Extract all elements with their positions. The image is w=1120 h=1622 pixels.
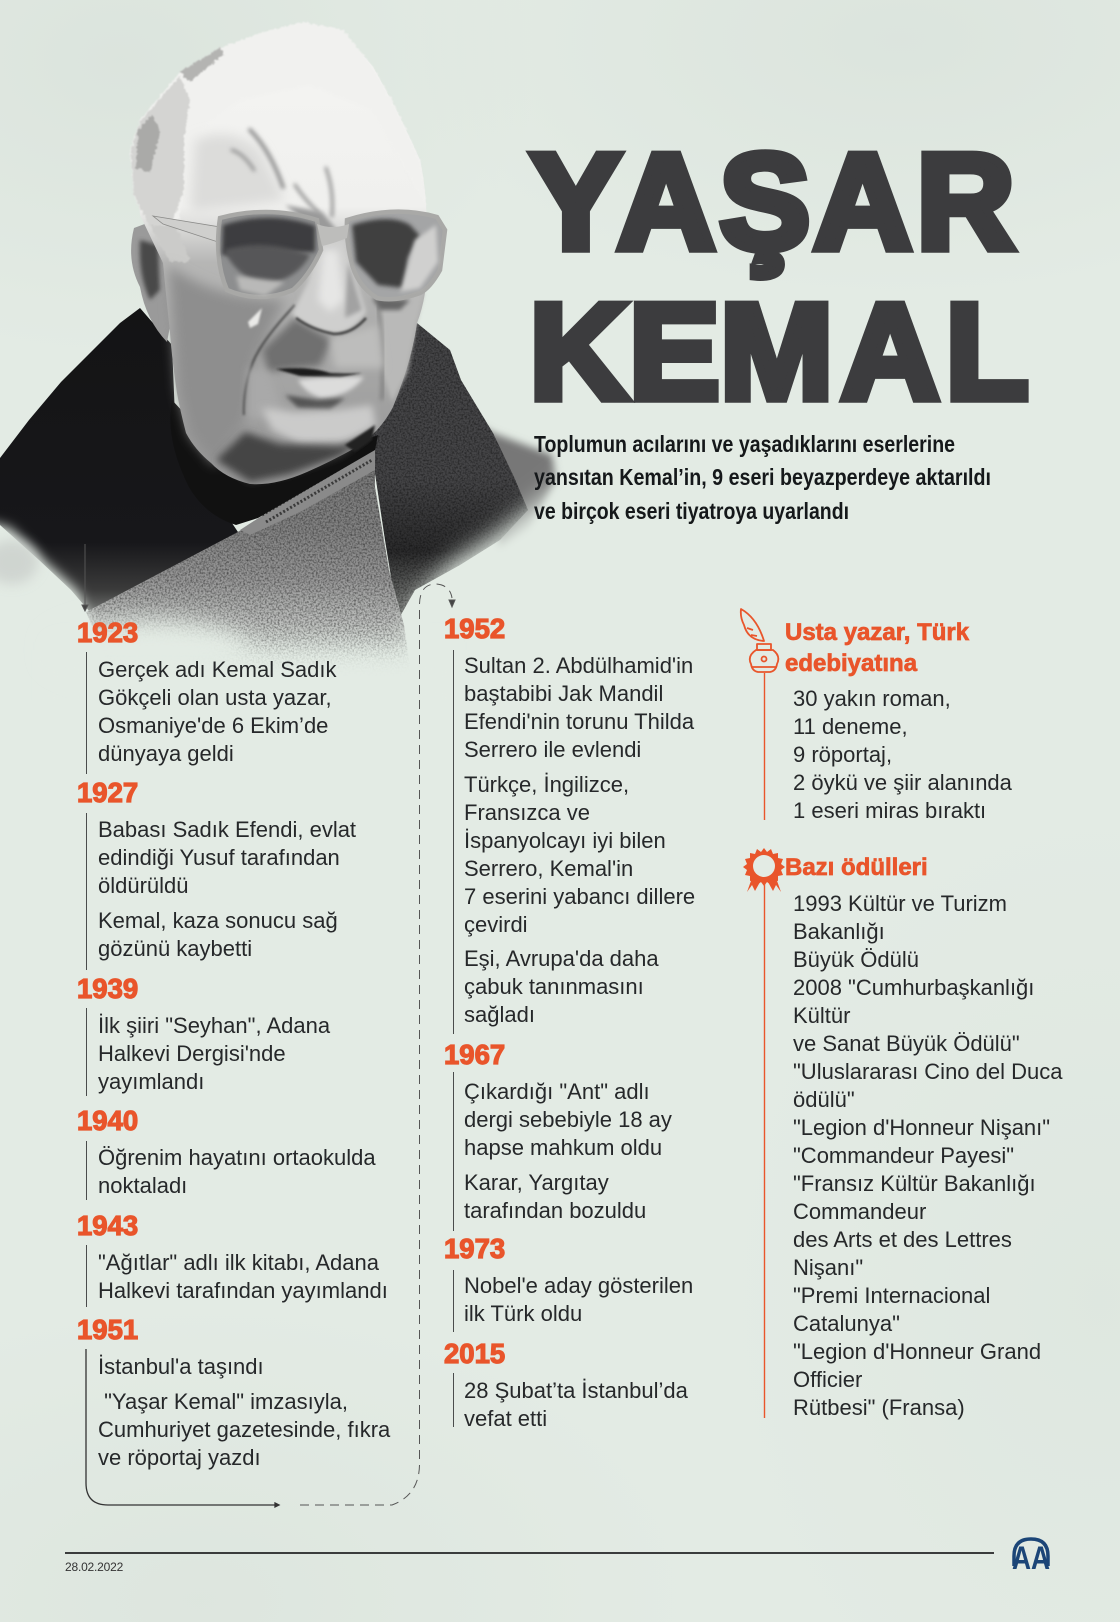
heading: awards: Bazı ödülleri	[785, 854, 928, 881]
right cheek	[378, 292, 424, 402]
entry: 1939: 1939	[77, 973, 138, 1004]
entry: 1943: 1943	[77, 1210, 138, 1241]
entry: 1951: İstanbul'a taşındı	[98, 1354, 264, 1379]
timeline column 1	[65, 613, 1062, 1574]
text: awards list: 1993 Kültür ve Turizm Bakanlığı Büyük Ödülü 2008 "Cumhurbaşkanlığı Kültür ve Sanat Büyük Ödülü" "Uluslararası Cino del Duca ödülü" "Legion d'Honneur Nişanı" "Commandeur Payesi" "Fransız Kültür Bakanlığı Commandeur des Arts et des Lettres Nişanı" "Premi Internacional Catalunya" "Legion d'Honneur Grand Officier Rütbesi" (Fransa)	[793, 890, 1062, 1420]
entry: 1940	[77, 1105, 376, 1200]
photo fade: right side	[408, 470, 640, 720]
left cheek	[168, 265, 285, 465]
entry: 1927: Kemal, kaza sonucu sağ gözünü kaybetti	[98, 908, 338, 960]
title: YAŞAR	[530, 126, 1015, 278]
hair	[130, 22, 426, 262]
subtitle	[534, 431, 991, 524]
glasses	[153, 212, 445, 299]
vertical rule: awards	[764, 882, 766, 1418]
entry: 1943: "Ağıtlar" adlı ilk kitabı, Adana Halkevi tarafından yayımlandı	[98, 1250, 388, 1303]
photo fade: left corner	[0, 518, 92, 720]
entry: 1939: İlk şiiri "Seyhan", Adana Halkevi Dergisi'nde yayımlandı	[98, 1013, 330, 1094]
entry: 1927	[77, 777, 356, 970]
sweater	[86, 450, 412, 690]
cheek highlight	[248, 308, 262, 328]
crease	[244, 305, 295, 415]
head silhouette	[139, 26, 428, 484]
entry: 1952	[444, 613, 695, 1034]
nose	[292, 240, 366, 333]
upper lip shadow	[262, 318, 332, 372]
entry: 1973	[444, 1233, 693, 1332]
entry: 1923: Gerçek adı Kemal Sadık Gökçeli olan usta yazar, Osmaniye'de 6 Ekim’de dünyaya geldi	[98, 657, 336, 766]
portrait photo of Yaşar Kemal	[0, 22, 560, 666]
title: KEMAL	[530, 276, 1029, 428]
turtleneck	[170, 400, 378, 525]
entry: 2015	[444, 1338, 688, 1431]
subtitle: yansıtan Kemal’in, 9 eseri beyazperdeye aktarıldı	[534, 464, 991, 490]
entry: 1973: Nobel'e aday gösterilen ilk Türk oldu	[464, 1273, 693, 1326]
entry: 1952: 1952	[444, 613, 505, 644]
coat left	[0, 308, 240, 612]
mouth	[276, 368, 362, 378]
entry: 1923: 1923	[77, 617, 138, 648]
entry: 1952: Eşi, Avrupa'da daha çabuk tanınmasını sağladı	[464, 946, 659, 1027]
chin	[262, 405, 376, 444]
entry: 1952: Türkçe, İngilizce, Fransızca ve İspanyolcayı iyi bilen Serrero, Kemal'in 7 eserini yabancı dillere çevirdi	[464, 772, 695, 936]
entry: 1967	[444, 1039, 672, 1231]
photo fade: sweater left	[50, 620, 250, 680]
icon: award rosette	[743, 848, 785, 892]
ear	[131, 222, 175, 342]
entry: 1951: 1951	[77, 1314, 138, 1345]
title	[530, 126, 1029, 428]
entry: 1940: Öğrenim hayatını ortaokulda noktaladı	[98, 1145, 376, 1198]
entry: 1967: 1967	[444, 1039, 505, 1070]
photo fade: bottom	[60, 650, 440, 720]
subtitle: Toplumun acılarını ve yaşadıklarını eserlerine	[534, 431, 955, 457]
entry: 2015: 2015	[444, 1338, 505, 1369]
entry: 1927: Babası Sadık Efendi, evlat edindiği Yusuf tarafından öldürüldü	[98, 817, 356, 898]
coat collar right	[370, 320, 528, 620]
subtitle: ve birçok eseri tiyatroya uyarlandı	[534, 498, 849, 524]
arrow: 1951 line wrapping to next column	[86, 1349, 279, 1507]
entry: 1940: 1940	[77, 1105, 138, 1136]
entry: 2015: 28 Şubat’ta İstanbul’da vefat etti	[464, 1378, 688, 1431]
forehead shading	[190, 134, 285, 212]
date: 28.02.2022	[65, 1560, 123, 1574]
entry: 1967: Karar, Yargıtay tarafından bozuldu	[464, 1170, 646, 1222]
entry: 1973: 1973	[444, 1233, 505, 1264]
icon: quill and ink bottle	[741, 609, 778, 672]
footer rule	[65, 1552, 994, 1554]
text: works list: 30 yakın roman, 11 deneme, 9 röportaj, 2 öykü ve şiir alanında 1 eseri miras bıraktı	[793, 686, 1012, 822]
entry: 1923	[77, 617, 336, 774]
entry: 1967: Çıkardığı "Ant" adlı dergi sebebiyle 18 ay hapse mahkum oldu	[464, 1079, 672, 1160]
entry: 1943	[77, 1210, 388, 1307]
heading: works: Usta yazar, Türk edebiyatına	[785, 619, 969, 677]
entry: 1951: "Yaşar Kemal" imzasıyla, Cumhuriyet gazetesinde, fıkra ve röportaj yazdı	[98, 1388, 390, 1470]
arrow: into 1923	[82, 544, 88, 611]
entry: 1927: 1927	[77, 777, 138, 808]
right shoulder	[478, 425, 556, 550]
vertical rule: works	[764, 673, 766, 820]
entry: 1952: Sultan 2. Abdülhamid'in baştabibi Jak Mandil Efendi'nin torunu Thilda Serrero ile evlendi	[464, 653, 694, 762]
dashed arrow: to 1952	[300, 584, 455, 1505]
entry: 1939	[77, 973, 330, 1096]
entry: 1951	[77, 1314, 390, 1470]
